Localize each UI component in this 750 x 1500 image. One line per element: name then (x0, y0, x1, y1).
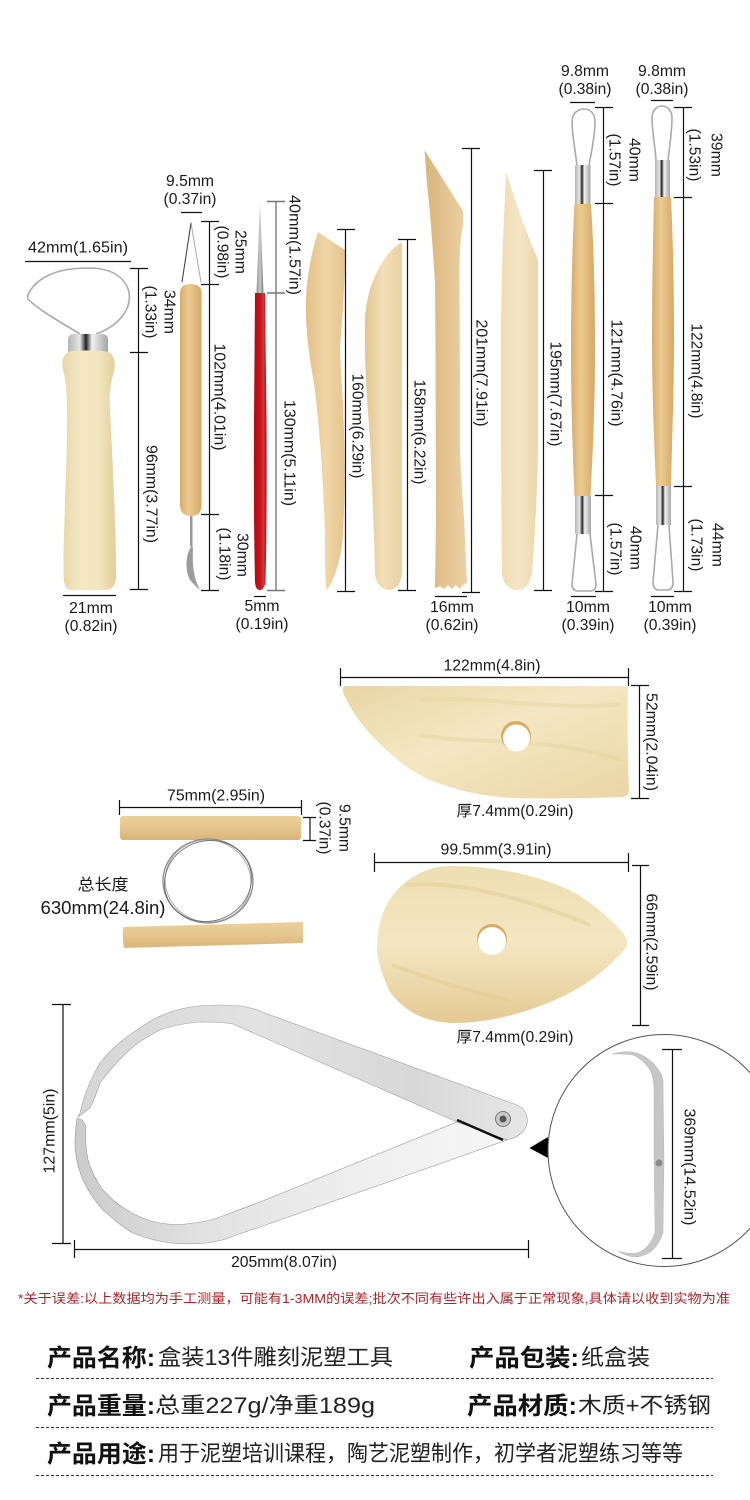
disclaimer note: *关于误差:以上数据均为手工测量，可能有1-3MM的误差;批次不同有些许出入属于正常现象,具体请以收到实物为准 (18, 1291, 730, 1306)
dimension: calipers height: 127mm(5in) (42, 1088, 58, 1174)
tool: red needle tool (254, 203, 267, 590)
dimension: loop tool B top width: (0.38in) (636, 81, 688, 98)
dimension: serrated knife length (462, 148, 490, 592)
spec row: weight and material: 木质+不锈钢 (578, 1393, 711, 1418)
dimension: rectangular rib height (631, 685, 660, 798)
tool: metal calipers (75, 1005, 527, 1244)
spec row: weight and material: 产品重量: (47, 1393, 155, 1420)
dimension: needle tool lengths: 130mm(5.11in) (280, 400, 298, 506)
spec row: usage: 产品用途: (47, 1440, 155, 1468)
dimension: triangle tool width (164, 173, 216, 212)
spec row: usage (36, 1440, 713, 1476)
dimension: loop tool A lengths: 121mm(4.76in) (608, 320, 624, 426)
dimension: loop tool lengths (130, 268, 178, 590)
dimension: needle tool width (236, 596, 288, 633)
dimension: loop tool handle width: (0.82in) (64, 618, 118, 635)
dimension: loop tool A bottom width: (0.39in) (562, 617, 614, 634)
dimension: straight knife length (534, 170, 564, 590)
label: total wire length: 总长度 (78, 876, 128, 894)
dimension: needle tool width: 5mm (244, 598, 280, 615)
dimension: dowel length (120, 788, 302, 815)
dimension: teardrop rib width: 99.5mm(3.91in) (440, 842, 552, 858)
spec row: usage: 用于泥塑培训课程，陶艺泥塑制作，初学者泥塑练习等等 (158, 1441, 683, 1466)
tool: straight wooden knife (501, 172, 538, 590)
spec row: product name and packaging: 产品包装: (469, 1345, 579, 1372)
callout: calipers side view circle: 369mm(14.52in) (680, 1108, 698, 1226)
dimension: serrated knife width: (0.62in) (426, 617, 478, 634)
dimension: rectangular rib width (340, 658, 629, 686)
dimension: serrated knife width (426, 596, 478, 634)
dimension: triangle tool lengths: 30mm (234, 533, 250, 577)
dimension: loop tool A lengths: (1.57in) (606, 134, 622, 186)
dimension: triangle tool lengths: (0.98in) (214, 226, 230, 278)
dimension: rounded knife length: 158mm(6.22in) (410, 380, 428, 484)
dimension: loop tool A lengths: 40mm (626, 138, 642, 182)
dimension: loop tool width: 42mm(1.65in) (28, 240, 128, 256)
dimension: loop tool B top width (636, 63, 688, 100)
dimension: needle tool lengths: 40mm(1.57in) (286, 195, 302, 295)
dimension: loop tool A lengths: (1.57in) (606, 522, 624, 576)
spec row: weight and material: 总重227g/净重189g (155, 1393, 375, 1418)
dimension: teardrop rib height (632, 865, 660, 1026)
tool: teardrop rib with hole (377, 866, 627, 1023)
tool: serrated wooden knife (424, 150, 467, 589)
label: rectangular rib thickness: 厚7.4mm(0.29in) (456, 803, 574, 820)
arrow: pointer to side view (530, 1137, 548, 1158)
dimension: triangle tool lengths: 102mm(4.01in) (210, 344, 228, 450)
dimension: loop tool B lengths: 122mm(4.8in) (688, 324, 704, 418)
dimension: loop tool width (25, 240, 131, 262)
tool: triangle and hook tool (180, 223, 202, 590)
spec row: weight and material (36, 1393, 713, 1428)
dimension: serrated knife width: 16mm (430, 599, 474, 616)
dimension: loop tool A top width: 9.8mm (561, 63, 609, 80)
dimension: loop tool A bottom width: 10mm (566, 599, 610, 616)
dimension: rounded knife length (398, 239, 428, 590)
tool: wire clay cutter (120, 816, 303, 948)
dimension: teardrop rib height: 66mm(2.59in) (642, 893, 660, 991)
dimension: loop tool B lengths: (1.73in) (688, 518, 704, 572)
dimension: needle tool width: (0.19in) (236, 616, 288, 633)
dimension: dowel diameter: (0.37in) (316, 802, 332, 854)
dimension: rectangular rib width: 122mm(4.8in) (444, 658, 540, 674)
tool: rectangular rib with hole (343, 686, 629, 798)
dimension: loop tool A lengths: 40mm (626, 526, 644, 570)
dimension: loop tool lengths: (1.33in) (142, 286, 158, 338)
spec row: product name and packaging: 产品名称: (47, 1345, 155, 1372)
dimension: loop tool handle width: 21mm (69, 600, 113, 617)
dimension: curved knife length (337, 229, 366, 592)
dimension: curved knife length: 160mm(6.29in) (348, 374, 366, 478)
tool: wire loop tool with pale handle (28, 268, 129, 590)
dimension: loop tool lengths: 34mm (160, 290, 178, 334)
spec row: product name and packaging: 纸盒装 (581, 1345, 650, 1370)
label: total wire length (40, 876, 166, 918)
dimension: loop tool B lengths: 44mm (708, 523, 726, 567)
dimension: calipers width: 205mm(8.07in) (231, 1254, 337, 1271)
dimension: loop tool A top width: (0.38in) (558, 81, 612, 98)
dimension: serrated knife length: 201mm(7.91in) (472, 320, 490, 426)
dimension: straight knife length: 195mm(7.67in) (546, 342, 564, 446)
dimension: dowel length: 75mm(2.95in) (167, 788, 265, 804)
callout: calipers side view circle (548, 1034, 750, 1266)
dimension: triangle tool width: 9.5mm (166, 173, 214, 190)
dimension: loop tool B top width: 9.8mm (638, 63, 686, 80)
dimension: loop tool B lengths (674, 107, 726, 592)
dimension: rectangular rib height: 52mm(2.04in) (642, 693, 660, 791)
dimension: calipers width (74, 1240, 528, 1271)
dimension: loop tool B bottom width (644, 596, 696, 634)
dimension: calipers height (42, 1004, 71, 1244)
dimension: loop tool B bottom width: (0.39in) (644, 617, 696, 634)
dimension: loop tool handle width (63, 596, 118, 635)
tool: rounded wooden knife (365, 242, 402, 590)
dimension: loop tool lengths: 96mm(3.77in) (142, 445, 160, 543)
dimension: loop tool A top width (558, 63, 612, 102)
dimension: loop tool B lengths: (1.53in) (686, 128, 702, 182)
tool: curved wooden knife (306, 232, 345, 590)
dimension: needle tool lengths (267, 195, 302, 590)
dimension: triangle tool lengths: 25mm (232, 230, 248, 274)
dimension: triangle tool lengths (201, 221, 250, 590)
dimension: loop tool A bottom width (562, 596, 614, 634)
dimension: loop tool B bottom width: 10mm (648, 599, 692, 616)
dimension: loop tool B lengths: 39mm (708, 133, 724, 177)
dimension: teardrop rib width (374, 842, 628, 872)
dimension: loop tool A lengths (595, 107, 644, 592)
label: total wire length: 630mm(24.8in) (40, 898, 166, 918)
tool: double-ended loop tool B (652, 106, 674, 590)
dimension: triangle tool lengths: (1.18in) (216, 528, 232, 580)
dimension: dowel diameter: 9.5mm (336, 804, 352, 852)
spec row: product name and packaging (36, 1345, 713, 1378)
spec row: product name and packaging: 盒装13件雕刻泥塑工具 (158, 1345, 393, 1370)
spec row: weight and material: 产品材质: (467, 1393, 577, 1420)
label: teardrop rib thickness: 厚7.4mm(0.29in) (456, 1029, 574, 1046)
tool: double-ended loop tool A (571, 109, 596, 591)
dimension: dowel diameter (303, 802, 352, 854)
dimension: triangle tool width: (0.37in) (164, 191, 216, 208)
